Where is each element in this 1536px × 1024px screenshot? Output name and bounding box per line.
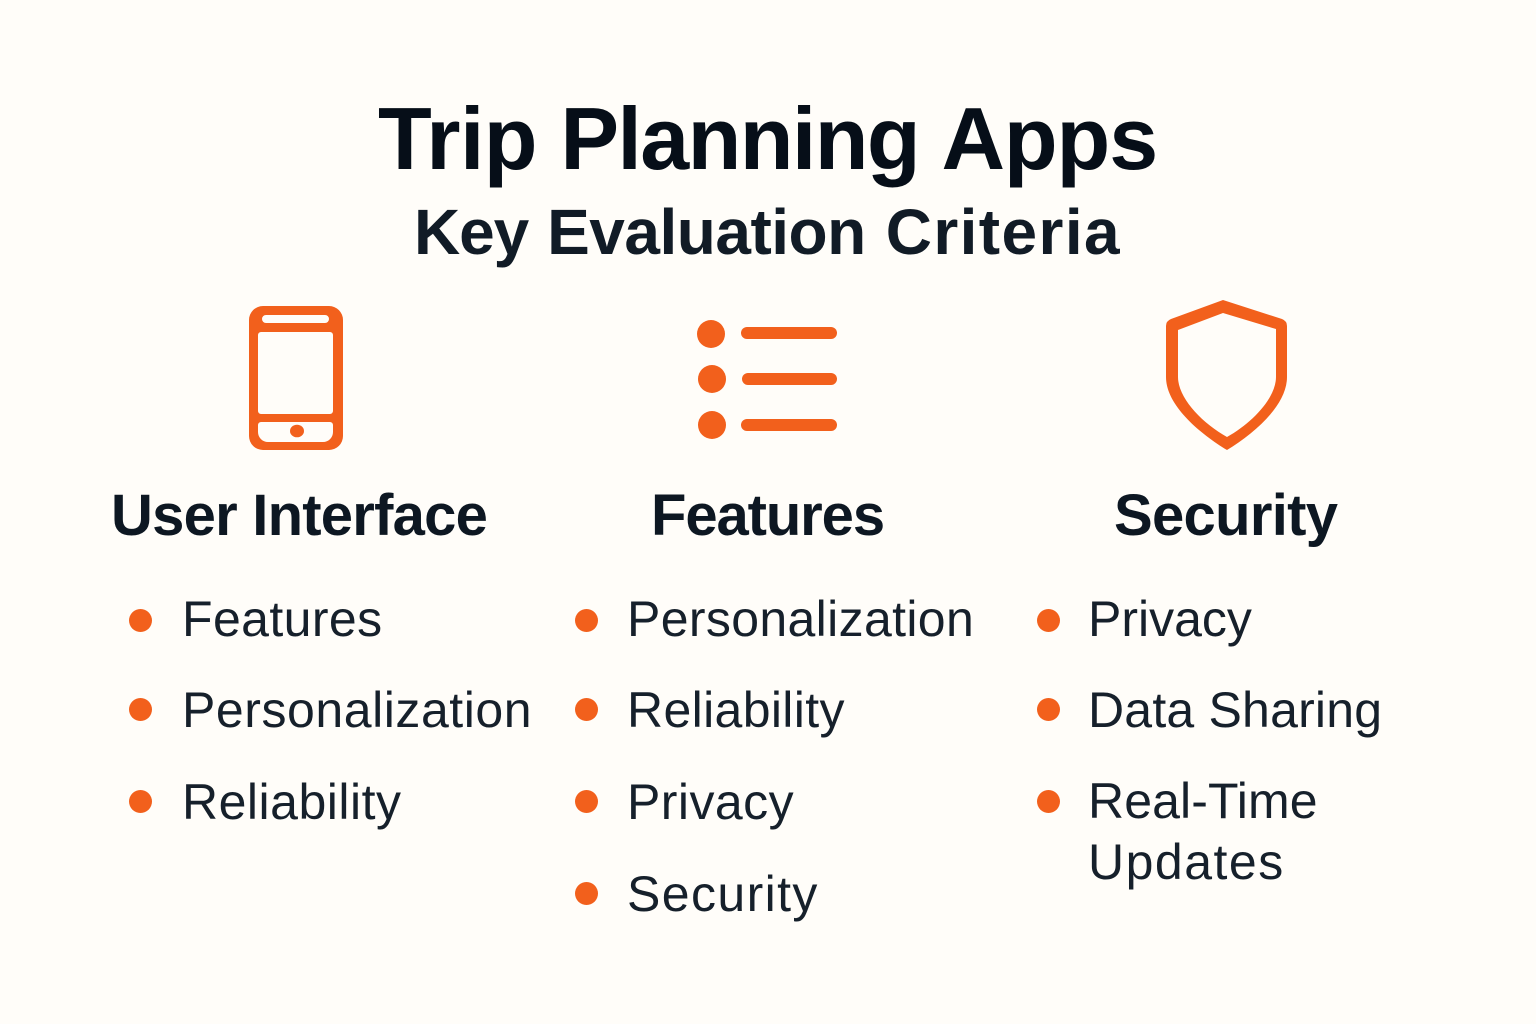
list item: personalization: Personalization — [182, 682, 532, 738]
list item: personalization: Personalization — [627, 591, 974, 647]
icon: list — [697, 320, 837, 439]
list item: data sharing: Data Sharing — [1088, 682, 1382, 738]
panel: features — [575, 320, 974, 922]
list item: security: Security — [627, 866, 819, 922]
icon: shield — [1166, 300, 1287, 450]
icon: smartphone — [249, 306, 343, 450]
panel: user interface — [111, 306, 532, 830]
list item: real-time updates: Updates — [1088, 834, 1285, 890]
title: Trip Planning Apps — [378, 89, 1157, 188]
list item: real-time updates — [1037, 773, 1318, 890]
heading: security: Security — [1114, 483, 1337, 548]
list item: reliability: Reliability — [627, 682, 845, 738]
list item: real-time updates: Real-Time — [1088, 773, 1318, 829]
heading: user interface: User Interface — [111, 483, 487, 548]
list item: reliability: Reliability — [182, 774, 401, 830]
list item: features: Features — [182, 591, 383, 647]
subtitle: Key Evaluation Criteria — [414, 196, 1121, 268]
list item: privacy: Privacy — [1088, 591, 1252, 647]
list item: privacy: Privacy — [627, 774, 794, 830]
heading: features: Features — [651, 483, 884, 548]
